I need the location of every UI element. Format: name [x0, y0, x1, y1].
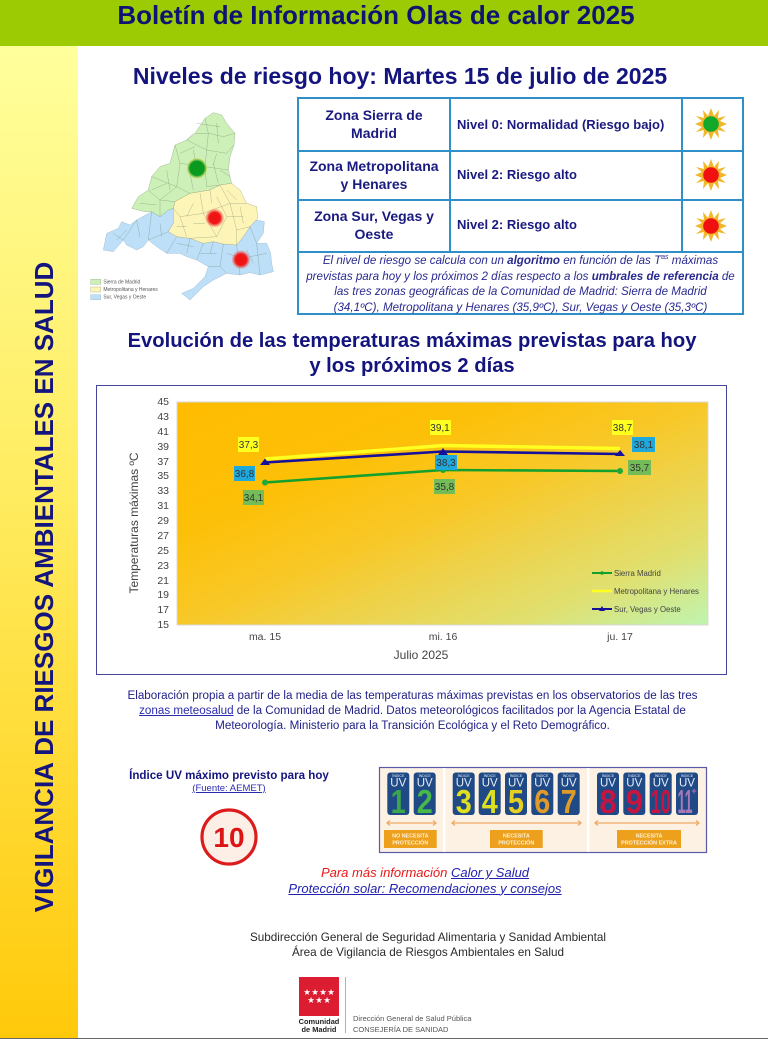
UV cards: 10	[651, 783, 671, 820]
zone name: Sierra: Madrid	[351, 124, 397, 140]
map of risk zones	[90, 112, 274, 301]
logo red square with stars: ★	[327, 988, 335, 998]
UV cards: UV	[417, 778, 433, 790]
map legend: Metropolitana y Henares	[103, 287, 158, 293]
header banner	[0, 0, 768, 46]
UV cards: UV	[390, 778, 407, 790]
row divider	[297, 251, 744, 253]
logo divider	[345, 977, 346, 1033]
UV cards: 9	[626, 783, 643, 820]
series: Sur, Vegas y Oeste	[260, 448, 624, 464]
more information links: Para más información Calor y Salud	[321, 865, 529, 880]
algorithm note: previstas para hoy y los próximos 2 días respecto a los umbrales de referencia de	[306, 270, 735, 282]
UV cards: +	[691, 786, 697, 796]
UV heading: Índice UV máximo previsto para hoy	[129, 769, 329, 782]
y axis ticks: 33	[157, 484, 169, 496]
logo red square with stars: ★	[311, 988, 319, 998]
UV cards: ÍNDICE	[536, 774, 549, 778]
x axis title: Julio 2025	[393, 648, 448, 662]
bottom edge line	[0, 1038, 768, 1039]
risk table	[297, 97, 744, 315]
zone: Metropolitana y Henares	[168, 183, 258, 245]
row divider	[297, 199, 744, 201]
level: Sierra: Nivel 0: Normalidad (Riesgo bajo)	[457, 116, 664, 132]
data labels: 35,8	[434, 482, 454, 492]
data labels: 34,1	[243, 492, 263, 504]
UV cards: UV	[482, 778, 498, 790]
series: Metropolitana y Henares	[264, 445, 620, 458]
y axis ticks: 31	[157, 500, 169, 512]
UV cards: UV	[600, 778, 616, 790]
y axis ticks: 23	[157, 560, 169, 572]
UV cards: ÍNDICE	[419, 774, 431, 778]
icon: sun green	[695, 108, 727, 140]
column divider	[449, 97, 451, 253]
data source paragraph: Meteorología. Ministerio para la Transición Ecológica y el Reto Demográfico.	[215, 719, 610, 732]
y axis ticks: 15	[157, 618, 169, 630]
algorithm note: El nivel de riesgo se calcula con un algoritmo en función de las Tas máximas	[323, 254, 718, 267]
UV cards: 6	[534, 783, 550, 820]
y axis ticks: 21	[157, 574, 169, 586]
UV source link: (Fuente: AEMET)	[192, 783, 266, 794]
logo red square with stars: ★	[315, 996, 323, 1006]
department credits	[250, 931, 606, 959]
UV cards	[387, 772, 698, 820]
UV cards: 2	[417, 783, 433, 820]
x axis labels: ju. 17	[606, 630, 633, 642]
zone name: Metropolitana	[309, 158, 439, 192]
chart legend: Sierra Madrid	[614, 568, 660, 578]
line chart	[126, 396, 708, 662]
UV cards: UV	[456, 778, 472, 790]
zone name: Sur: Zona Sur, Vegas y	[314, 208, 434, 224]
UV cards: 4	[482, 783, 498, 820]
chart legend: Sur, Vegas y Oeste	[614, 604, 680, 614]
y axis ticks: 17	[157, 604, 169, 616]
data labels: 35,7	[629, 462, 649, 474]
y axis title: Temperaturas máximas ºC	[126, 452, 140, 593]
map legend	[91, 279, 158, 301]
y axis ticks: 19	[157, 588, 169, 600]
UV cards: ÍNDICE	[681, 774, 694, 778]
UV cards: ÍNDICE	[458, 774, 470, 778]
zone: Sierra de Madrid	[132, 113, 235, 217]
y axis ticks: 43	[157, 410, 169, 422]
risk dot: Sierra, green	[187, 158, 207, 179]
logo red square with stars: ★	[323, 996, 331, 1006]
UV value badge: 10	[213, 822, 245, 853]
zone name: Metropolitana: Zona Metropolitana	[309, 158, 439, 174]
zone name: Sierra	[325, 106, 423, 140]
ministry text: CONSEJERÍA DE SANIDAD	[353, 1024, 448, 1034]
x axis labels: mi. 16	[428, 630, 457, 642]
y axis ticks	[157, 396, 169, 630]
algorithm note: las tres zonas geográficas de la Comunidad de Madrid: Sierra de Madrid	[334, 285, 707, 298]
data labels: 37,3	[238, 440, 258, 450]
UV cards: ÍNDICE	[628, 774, 641, 778]
UV cards: UV	[679, 778, 695, 790]
icon: sun red	[695, 159, 727, 191]
UV cards: 5	[508, 783, 524, 820]
risk dot: Metropolitana, red	[205, 209, 224, 227]
data labels: 38,3	[436, 458, 456, 468]
logo wordmark: Comunidad	[299, 1017, 339, 1026]
logo red square with stars	[299, 977, 339, 1016]
y axis ticks: 45	[157, 396, 169, 408]
y axis ticks: 35	[157, 470, 169, 482]
heading: temperature evolution: y los próximos 2 días	[309, 355, 515, 377]
ministry text	[353, 1014, 472, 1034]
scale arrows	[387, 820, 699, 826]
icon: sun red	[695, 210, 727, 242]
algorithm note	[306, 254, 735, 314]
protection labels: PROTECCIÓN	[392, 838, 428, 846]
UV cards: ÍNDICE	[484, 774, 496, 778]
UV cards: ÍNDICE	[602, 774, 615, 778]
sidebar	[0, 46, 78, 1039]
UV cards: ÍNDICE	[510, 774, 523, 778]
UV cards: UV	[626, 778, 643, 790]
UV cards: UV	[653, 778, 669, 790]
title: Boletín de Información Olas de calor 2025	[117, 0, 635, 30]
protection labels: PROTECCIÓN	[498, 838, 534, 846]
table grid lines	[297, 150, 744, 152]
zone name: Sur	[314, 208, 434, 242]
data source paragraph: zonas meteosalud de la Comunidad de Madrid. Datos meteorológicos facilitados por la Agencia Estatal de	[139, 704, 686, 717]
chart legend	[592, 568, 699, 614]
more information links: Protección solar: Recomendaciones y consejos	[288, 880, 562, 896]
y axis ticks: 29	[157, 514, 169, 526]
data labels: 38,1	[633, 440, 653, 450]
level: Sur: Nivel 2: Riesgo alto	[457, 217, 577, 232]
UV cards: ÍNDICE	[563, 774, 575, 778]
UV cards: 8	[600, 783, 616, 820]
UV cards: 1	[391, 783, 406, 820]
zone name: Metropolitana: y Henares	[341, 176, 407, 192]
UV cards: UV	[534, 778, 551, 790]
data labels: 39,1	[430, 422, 450, 434]
zone name: Sur: Oeste	[355, 226, 393, 242]
y axis ticks: 41	[157, 426, 169, 438]
UV value badge	[200, 808, 258, 866]
y axis ticks: 37	[157, 456, 169, 468]
UV index scale	[378, 766, 708, 854]
data labels	[234, 420, 654, 504]
heading: temperature evolution: Evolución de las temperaturas máximas previstas para hoy	[128, 330, 696, 352]
y axis ticks: 27	[157, 530, 169, 542]
UV cards: ÍNDICE	[655, 774, 667, 778]
UV cards: ÍNDICE	[392, 774, 405, 778]
protection labels	[384, 830, 681, 848]
chart legend: Metropolitana y Henares	[614, 586, 699, 596]
y axis ticks: 39	[157, 440, 169, 452]
logo red square with stars: ★	[319, 988, 327, 998]
UV cards: 11	[678, 783, 692, 820]
chart panel	[96, 385, 727, 675]
column divider	[681, 97, 683, 253]
map legend: Sur, Vegas y Oeste	[103, 295, 146, 301]
x axis labels	[248, 630, 633, 642]
heading: risk levels: Niveles de riesgo hoy: Martes 15 de julio de 2025	[133, 63, 667, 89]
data labels: 36,8	[234, 468, 254, 480]
logo wordmark	[298, 1017, 339, 1034]
protection labels: NECESITA	[503, 834, 530, 840]
logo red square with stars: ★	[303, 988, 311, 998]
y axis ticks: 25	[157, 544, 169, 556]
level: Metropolitana: Nivel 2: Riesgo alto	[457, 166, 577, 182]
more information links	[288, 865, 562, 896]
risk dot: Sur, red	[232, 250, 250, 269]
logo red square with stars: ★	[307, 996, 315, 1006]
UV cards: UV	[561, 778, 577, 790]
data labels: 38,7	[612, 422, 632, 434]
data source paragraph: Elaboración propia a partir de la media de las temperaturas máximas previstas en los observatorios de las tres	[127, 689, 698, 702]
UV cards: 3	[456, 783, 472, 820]
department credits: Subdirección General de Seguridad Alimentaria y Sanidad Ambiental	[250, 931, 606, 944]
protection labels: NECESITA	[636, 834, 663, 840]
algorithm note: (34,1ºC), Metropolitana y Henares (35,9ºC), Sur, Vegas y Oeste (35,3ºC)	[334, 300, 707, 314]
data source paragraph	[127, 689, 698, 732]
map legend: Sierra de Madrid	[103, 279, 141, 285]
logo: Comunidad de Madrid	[298, 977, 472, 1034]
municipal boundaries	[113, 118, 267, 275]
plot area	[176, 402, 708, 624]
protection labels: NO NECESITA	[392, 834, 429, 840]
series: Sierra Madrid	[262, 466, 622, 485]
scale background	[380, 768, 706, 852]
department credits: Área de Vigilancia de Riesgos Ambientales en Salud	[292, 946, 564, 959]
UV cards: UV	[508, 778, 524, 790]
ministry text: Dirección General de Salud Pública	[353, 1014, 471, 1023]
zone: Sur, Vegas y Oeste	[103, 208, 273, 300]
protection labels: PROTECCIÓN EXTRA	[621, 838, 677, 846]
x axis labels: ma. 15	[248, 630, 281, 642]
heading: temperature evolution	[128, 330, 696, 377]
zone name: Sierra: Zona Sierra de	[325, 106, 423, 122]
sidebar vertical title: VIGILANCIA DE RIESGOS AMBIENTALES EN SALUD	[29, 262, 59, 912]
UV cards: 7	[561, 783, 577, 820]
logo wordmark: de Madrid	[302, 1025, 336, 1034]
